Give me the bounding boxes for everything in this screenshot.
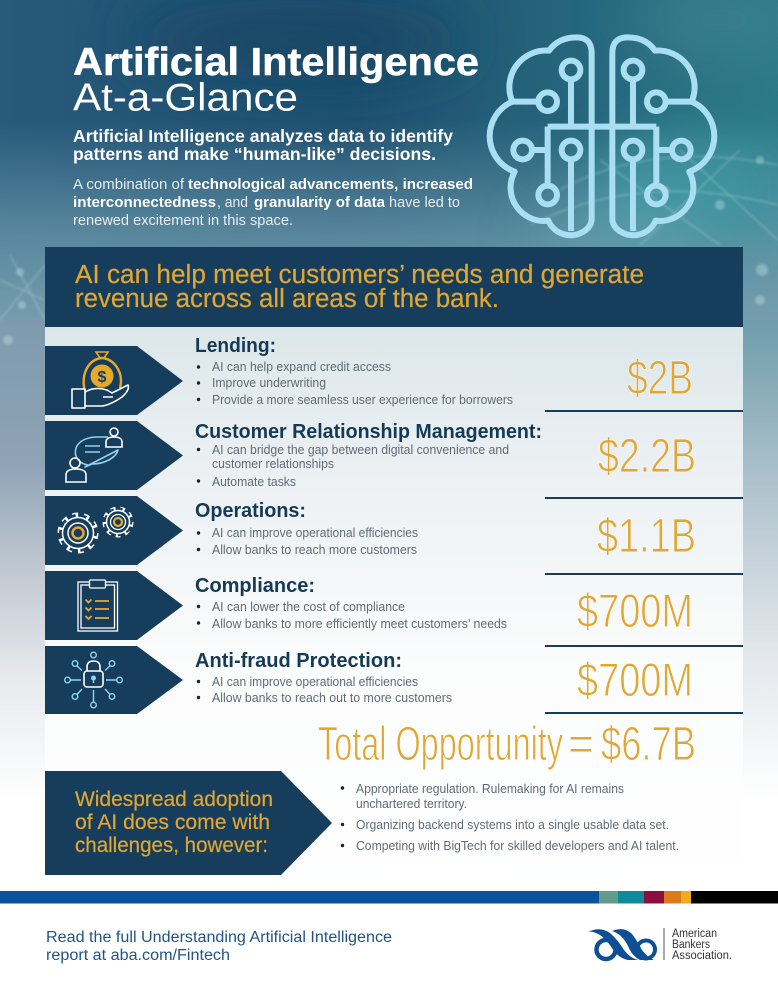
logo wordmark: American: [672, 928, 717, 940]
background: tech photo: [0, 0, 778, 800]
footer call to action: Read the full Understanding Artificial Intelligence: [46, 929, 392, 946]
challenges list: Competing with BigTech for skilled developers and AI talent.: [356, 838, 679, 853]
intro statement: [73, 126, 453, 164]
intro paragraph: A combination of: [73, 176, 185, 193]
operations heading: Operations:: [195, 499, 306, 522]
row: lending: [45, 334, 693, 415]
arrow with chat icon: [45, 421, 183, 490]
total opportunity: =: [568, 718, 594, 771]
crm bullets: Automate tasks: [212, 474, 296, 489]
arrow with lock network icon: [45, 646, 183, 714]
intro paragraph: technological advancements, increased: [188, 176, 473, 193]
challenges list: [341, 781, 679, 853]
anti-fraud value: $700M: [577, 653, 693, 706]
callout: challenges arrow: Widespread adoption: [75, 787, 273, 811]
row: operations: [45, 496, 696, 565]
banner: revenue headline: [45, 247, 743, 327]
crm bullets: AI can bridge the gap between digital convenience and: [212, 442, 509, 457]
logo wordmark: Bankers: [672, 939, 710, 951]
logo wordmark: [672, 928, 732, 962]
crm bullets: [197, 442, 509, 489]
lending bullets: Improve underwriting: [212, 375, 326, 390]
title: Artificial Intelligence: [73, 41, 479, 84]
lending heading: Lending:: [195, 334, 276, 357]
lending bullets: AI can help expand credit access: [212, 359, 391, 374]
callout: challenges arrow: of AI does come with: [75, 810, 270, 834]
callout: challenges arrow: [45, 771, 332, 875]
logo: American Bankers Association: [588, 928, 732, 962]
lending value: $2B: [627, 352, 693, 405]
arrow with clipboard icon: [45, 571, 183, 640]
row: customer relationship management: [45, 420, 696, 490]
banner: revenue headline: revenue across all areas of the bank.: [75, 285, 499, 313]
logo wordmark: Association.: [672, 950, 732, 962]
operations value: $1.1B: [597, 510, 696, 563]
total opportunity: Total Opportunity: [318, 718, 563, 771]
intro paragraph: interconnectedness: [73, 194, 216, 211]
crm bullets: customer relationships: [212, 456, 334, 471]
challenges list: unchartered territory.: [356, 796, 467, 811]
operations bullets: AI can improve operational efficiencies: [212, 525, 418, 540]
arrow with gears icon: [45, 496, 183, 565]
intro paragraph: have led to: [389, 194, 460, 211]
colour bar: [0, 891, 778, 904]
compliance bullets: AI can lower the cost of compliance: [212, 599, 405, 614]
banner: revenue headline: AI can help meet customers’ needs and generate: [75, 261, 644, 289]
compliance bullets: Allow banks to more efficiently meet customers’ needs: [212, 616, 507, 631]
crm heading: Customer Relationship Management:: [195, 420, 542, 443]
operations bullets: [197, 525, 418, 557]
intro paragraph: renewed excitement in this space.: [73, 212, 293, 229]
lending bullets: [197, 359, 513, 407]
challenges list: Appropriate regulation. Rulemaking for AI remains: [356, 781, 624, 796]
arrow with money bag icon: $: [98, 369, 107, 386]
anti-fraud bullets: Allow banks to reach out to more customers: [212, 690, 452, 705]
row: anti-fraud protection: [45, 646, 693, 714]
anti-fraud heading: Anti-fraud Protection:: [195, 649, 402, 672]
intro statement: patterns and make “human-like” decisions.: [73, 144, 436, 164]
footer call to action: [46, 929, 392, 964]
title: [73, 41, 479, 120]
compliance bullets: [197, 599, 507, 631]
panel: main content background: [45, 327, 743, 891]
compliance heading: Compliance:: [195, 574, 315, 597]
operations bullets: Allow banks to reach more customers: [212, 542, 417, 557]
total opportunity: $6.7B: [601, 718, 696, 771]
challenges list: Organizing backend systems into a single usable data set.: [356, 817, 669, 832]
arrow with money bag icon: [45, 346, 183, 415]
icon: circuit brain: [490, 37, 714, 235]
logo mark: [588, 929, 655, 960]
title: At-a-Glance: [73, 76, 298, 120]
lending bullets: Provide a more seamless user experience for borrowers: [212, 392, 513, 407]
anti-fraud bullets: AI can improve operational efficiencies: [212, 674, 418, 689]
compliance value: $700M: [577, 584, 693, 637]
crm value: $2.2B: [598, 430, 696, 483]
intro paragraph: , and: [217, 194, 248, 211]
intro statement: Artificial Intelligence analyzes data to identify: [73, 126, 453, 146]
row: compliance: [45, 571, 693, 640]
anti-fraud bullets: [197, 674, 452, 705]
callout: challenges arrow: challenges, however:: [75, 833, 268, 857]
intro paragraph: [73, 176, 473, 229]
footer call to action: report at aba.com/Fintech: [46, 947, 230, 964]
intro paragraph: granularity of data: [254, 194, 386, 211]
